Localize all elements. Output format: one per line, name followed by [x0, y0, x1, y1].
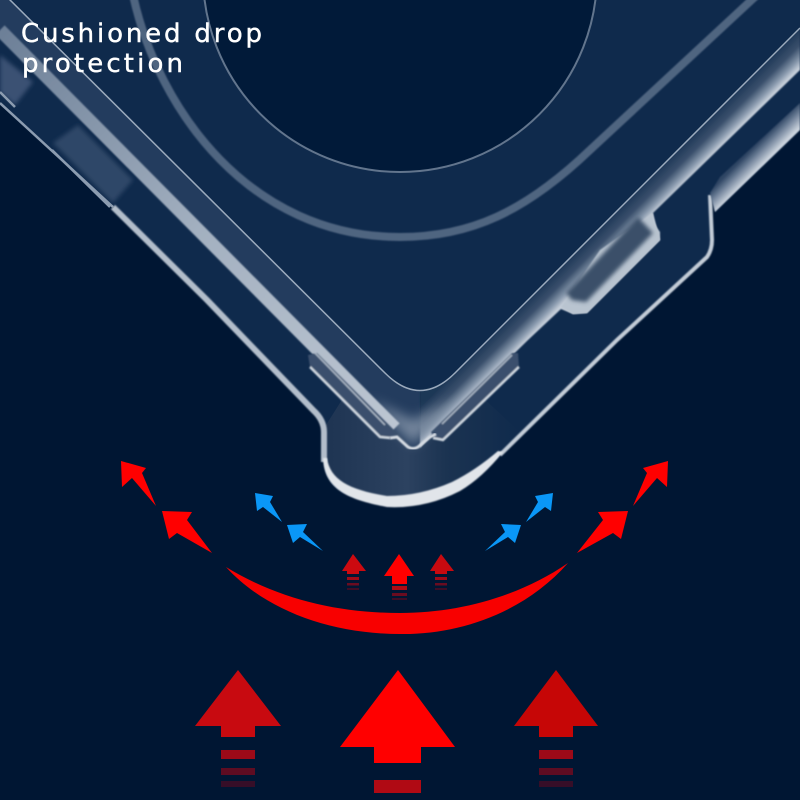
title: protection [22, 49, 183, 79]
title: Cushioned drop [21, 19, 262, 49]
left frame band [0, 0, 420, 448]
deflection arrows, blue left [255, 493, 323, 551]
case outline lower right [500, 195, 712, 455]
small arrow right [430, 554, 454, 590]
deflection arrows, red right [577, 461, 668, 553]
large arrow right [514, 670, 598, 787]
right corner tab [431, 353, 519, 440]
left frame strip [0, 30, 395, 428]
deflection arrows, blue right [485, 493, 553, 551]
phone case [0, 0, 800, 507]
right edge strip [710, 103, 800, 212]
corner glow [370, 400, 455, 445]
deflection arrows, red left [121, 461, 212, 553]
inner window edge [0, 0, 800, 390]
small arrow centre [384, 554, 414, 600]
right side tab [561, 213, 660, 314]
left corner tab [308, 353, 398, 438]
camera ring [133, 0, 757, 237]
camera opening [203, 0, 597, 172]
right frame band [420, 28, 800, 448]
bumper corner [326, 395, 520, 503]
button edge lines [0, 92, 110, 207]
case outline lower left [113, 207, 324, 462]
case body silhouette [0, 0, 800, 506]
large arrow centre [340, 670, 455, 793]
impact arc [226, 563, 568, 634]
left side buttons [0, 55, 133, 203]
case outline left [0, 103, 113, 207]
large arrow left [195, 670, 281, 787]
corner tip [390, 434, 436, 448]
bumper outline [323, 451, 503, 507]
small arrow left [342, 554, 366, 590]
